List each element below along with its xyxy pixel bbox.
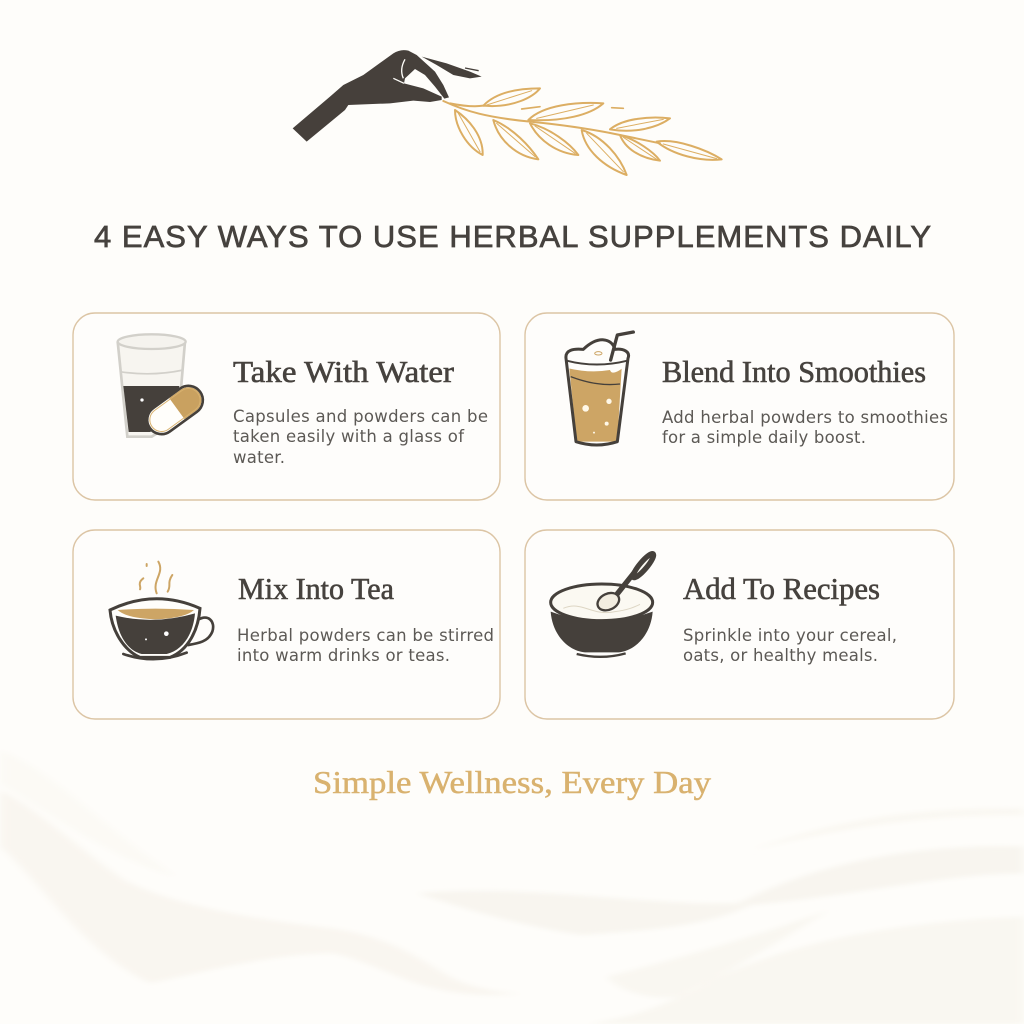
heading: Mix Into Tea [238, 571, 394, 606]
icon: bowl and spoon [551, 552, 656, 657]
text block: into warm drinks or teas. [237, 646, 450, 665]
panel: blend into smoothies [525, 313, 954, 500]
icon: smoothie cup [566, 332, 633, 445]
text block: Capsules and powders can be [233, 407, 488, 426]
panel: take with water [73, 313, 500, 500]
text block: Herbal powders can be stirred [237, 626, 494, 645]
heading: Blend Into Smoothies [662, 354, 926, 389]
text block: oats, or healthy meals. [683, 646, 878, 665]
panel: add to recipes [525, 530, 954, 719]
hand holding herb sprig illustration [293, 50, 722, 175]
icon: hand [293, 50, 482, 142]
heading: Take With Water [233, 354, 455, 389]
icon: herb sprig [443, 88, 722, 175]
text block: Add herbal powders to smoothies [662, 408, 948, 427]
text block: water. [233, 448, 285, 467]
text block: taken easily with a glass of [233, 427, 465, 446]
panel: mix into tea [73, 530, 500, 719]
icon: tea cup [110, 562, 213, 659]
text block: for a simple daily boost. [662, 428, 866, 447]
icon: glass and capsule [118, 334, 209, 440]
title: 4 EASY WAYS TO USE HERBAL SUPPLEMENTS DAILY [94, 219, 931, 254]
text block: Sprinkle into your cereal, [683, 626, 897, 645]
tagline: Simple Wellness, Every Day [313, 764, 711, 800]
background waves [0, 750, 1024, 1024]
heading: Add To Recipes [683, 571, 880, 606]
